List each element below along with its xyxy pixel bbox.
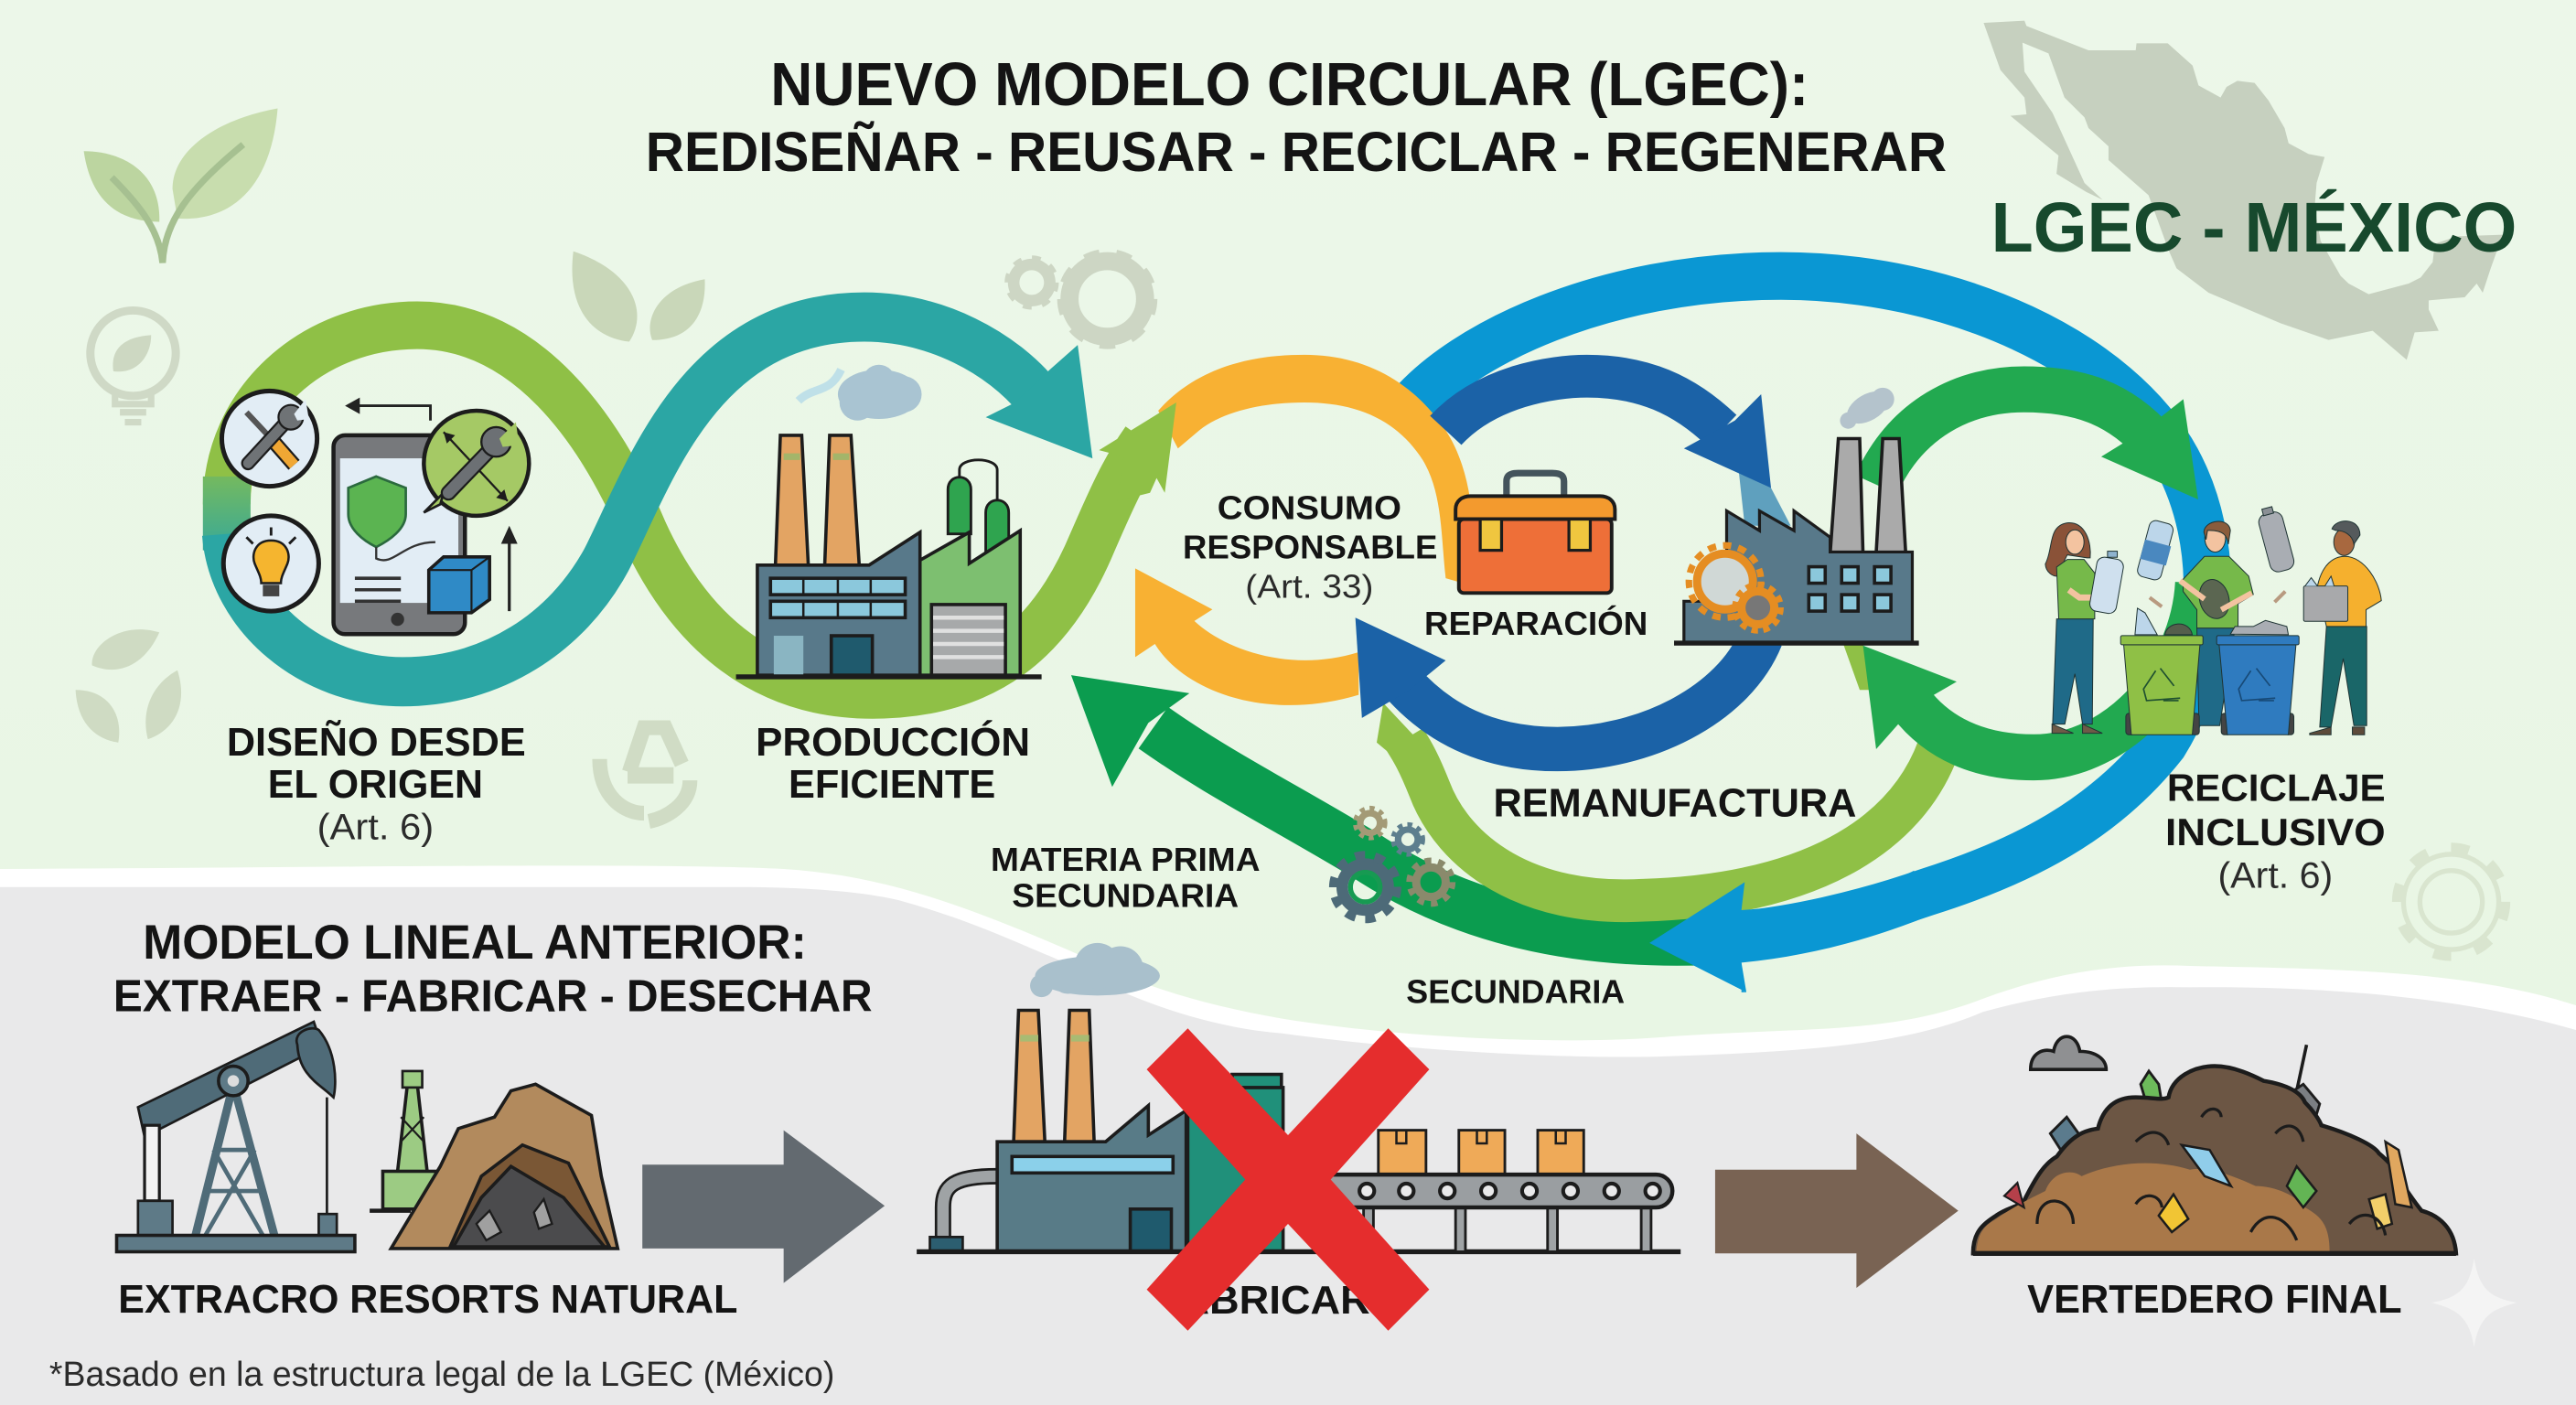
- arrow: dark blue top: [1445, 376, 1771, 488]
- label: reparación: REPARACIÓN: [1424, 605, 1648, 642]
- title: NUEVO MODELO CIRCULAR (LGEC):: [770, 51, 1809, 119]
- person: woman: [2045, 523, 2125, 734]
- person: man center: [2180, 521, 2253, 725]
- icon: remanufacture factory: [1674, 384, 1919, 643]
- icon: sprout: [84, 109, 278, 263]
- arrow: light green link near factory: [1843, 644, 1873, 690]
- icon: idea bulb circle: [223, 516, 318, 611]
- bottles floating: [2135, 507, 2296, 635]
- label: consumo responsable: CONSUMO: [1218, 489, 1401, 527]
- bins: [2120, 636, 2299, 735]
- arrow: infinity green: [227, 326, 1145, 695]
- icon: toolbox: [1455, 473, 1615, 593]
- arrow: yellow lower: [1135, 568, 1358, 705]
- label: materia prima secundaria: SECUNDARIA: [1012, 876, 1239, 914]
- label: diseño desde el origen: EL ORIGEN: [268, 763, 483, 807]
- arrow: light blue link: [1734, 435, 1791, 526]
- icon: efficient factory: [736, 365, 1042, 677]
- label: consumo responsable: RESPONSABLE: [1183, 529, 1437, 566]
- title: [646, 51, 1947, 183]
- person: man right: [2303, 521, 2381, 735]
- label: producción eficiente: EFICIENTE: [789, 763, 995, 807]
- arrow: blue tip over green: [1649, 871, 1938, 992]
- label: consumo responsable: (Art. 33): [1245, 568, 1373, 606]
- icon: light bulb with leaf: [91, 310, 176, 423]
- arrow: green right top: [1876, 390, 2198, 499]
- label: reciclaje inclusivo: [2165, 767, 2386, 896]
- icon: gears materia prima: [1334, 809, 1453, 918]
- label: materia prima secundaria: MATERIA PRIMA: [991, 841, 1260, 878]
- label: diseño desde el origen: [227, 721, 526, 848]
- label: diseño desde el origen: DISEÑO DESDE: [227, 721, 526, 765]
- label: extracro resorts natural: EXTRACRO RESORTS NATURAL: [118, 1278, 737, 1322]
- icon: small derrick: [370, 1071, 440, 1211]
- icon: design tablet: [334, 398, 529, 634]
- icon: mine mountain: [391, 1084, 617, 1249]
- arrow: brown manufacture to landfill: [1715, 1133, 1959, 1288]
- illustration: inclusive recycling people: [2045, 507, 2381, 735]
- icon: red X: [1147, 1028, 1429, 1331]
- arrow: green right bottom: [1863, 584, 2198, 757]
- label: diseño desde el origen: (Art. 6): [317, 808, 434, 848]
- arrow: gray extract to manufacture: [642, 1131, 885, 1283]
- arrow: dark blue lower: [1356, 617, 1761, 749]
- label: reciclaje inclusivo: (Art. 6): [2217, 856, 2333, 896]
- arrow: blue outer loop: [1410, 276, 2207, 992]
- arrow: light green lower: [1377, 703, 1938, 901]
- label: fabricar: FABRICAR: [1156, 1279, 1370, 1323]
- label: materia prima secundaria: [991, 841, 1260, 914]
- label: producción eficiente: [756, 720, 1030, 807]
- arrow: green head over yellow: [1099, 402, 1176, 501]
- heading: linear model: MODELO LINEAL ANTERIOR:: [143, 916, 807, 970]
- heading: LGEC Mexico: LGEC - MÉXICO: [1991, 188, 2517, 267]
- icon: oil pumpjack: [117, 1022, 355, 1251]
- icon: leaf recycle cluster: [76, 629, 181, 743]
- icon: sparkle: [2431, 1259, 2517, 1347]
- heading: linear model: EXTRAER - FABRICAR - DESECHAR: [113, 971, 873, 1021]
- title: REDISEÑAR - REUSAR - RECICLAR - REGENERAR: [646, 121, 1947, 183]
- label: secundaria: SECUNDARIA: [1406, 972, 1625, 1010]
- arrow: dark green return: [1071, 675, 1709, 940]
- white wave divider: [0, 865, 2576, 1405]
- icon: Mexico map silhouette: [1983, 21, 2503, 359]
- icon: landfill: [1973, 1036, 2456, 1253]
- panel: linear model background: [0, 887, 2576, 1405]
- label: consumo responsable: [1183, 489, 1437, 606]
- icon: gear right: [2397, 848, 2506, 956]
- arrow: infinity teal: [227, 317, 1092, 681]
- heading: linear model: [113, 916, 873, 1021]
- icon: leaves cluster center: [572, 252, 705, 342]
- footnote: *Basado en la estructura legal de la LGEC (México): [49, 1355, 834, 1393]
- icon: tools circle: [221, 391, 317, 487]
- label: reciclaje inclusivo: RECICLAJE: [2167, 767, 2386, 810]
- icon: gears top: [1009, 254, 1152, 343]
- label: producción eficiente: PRODUCCIÓN: [756, 720, 1030, 765]
- label: vertedero final: VERTEDERO FINAL: [2027, 1278, 2402, 1322]
- label: reciclaje inclusivo: INCLUSIVO: [2165, 811, 2386, 853]
- arrow: yellow top: [1158, 355, 1473, 585]
- label: remanufactura: REMANUFACTURA: [1493, 782, 1856, 826]
- icon: old factory and conveyor: [917, 943, 1680, 1251]
- icon: recycle symbol faded: [600, 728, 690, 821]
